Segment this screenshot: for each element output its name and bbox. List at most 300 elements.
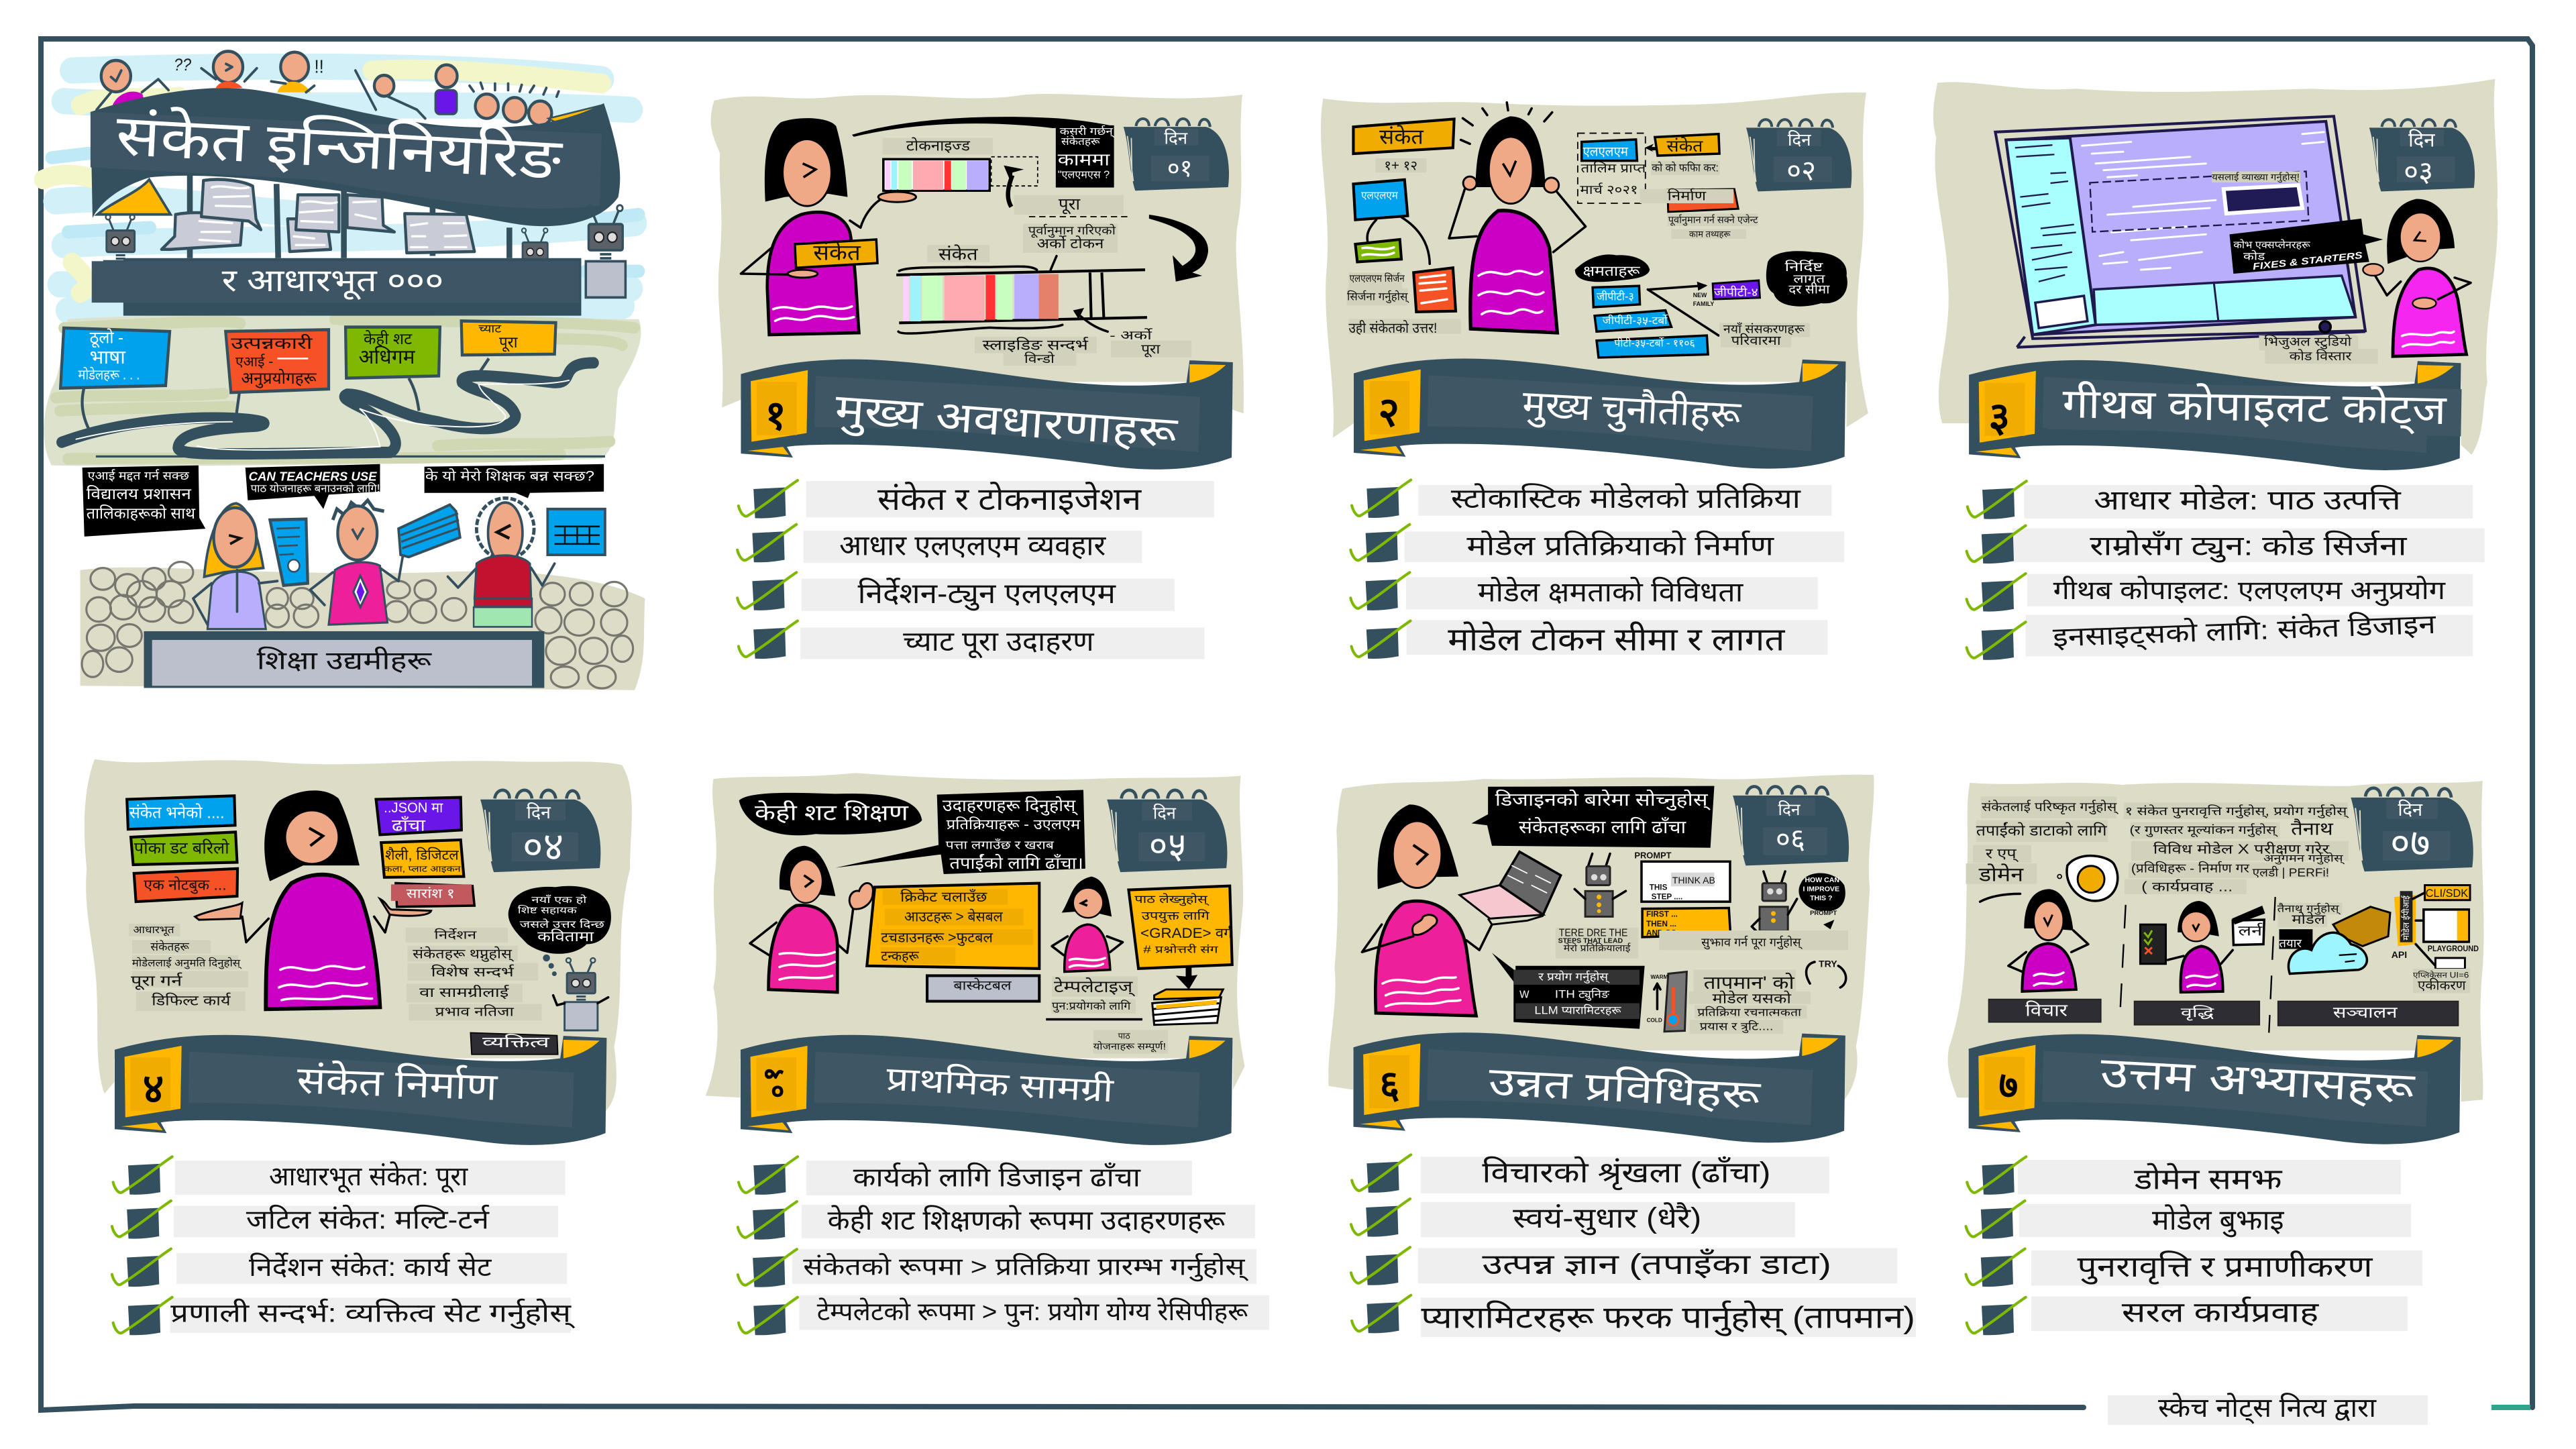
panel: day 2 key challenges — [1321, 93, 1868, 659]
calendar: दिन — [1778, 800, 1801, 819]
thermometer: WARM — [1650, 974, 1668, 980]
prompt sign: १+ १२ — [1384, 159, 1417, 174]
visual studio label: भिजुअल स्टुडियो — [2264, 334, 2353, 350]
sign: generative AI: एआई - — [235, 354, 273, 370]
banner — [1969, 1034, 2461, 1144]
checklist: मोडेल प्रतिक्रियाको निर्माण — [1466, 531, 1775, 561]
model version pills: जीपीटी-३ — [1597, 290, 1634, 303]
checklist: संकेतको रूपमा > प्रतिक्रिया प्रारम्भ गर्नुहोस् — [803, 1252, 1248, 1281]
callout: how prompts work — [1056, 125, 1115, 188]
banner — [741, 1035, 1232, 1145]
api and integrations: एकीकरण — [2418, 978, 2466, 994]
thought cloud: नयाँ एक हो — [531, 894, 587, 905]
right explanation: वा सामग्रीलाई — [419, 985, 510, 1000]
banner: २ — [1378, 389, 1399, 435]
next completion label: - अर्को — [1110, 328, 1153, 342]
title: संकेत इन्जिनियरिङ — [115, 103, 564, 192]
calendar — [1746, 119, 1851, 191]
banner: १ — [759, 1067, 788, 1081]
banner: ७ — [1999, 1064, 2018, 1106]
robot 2 — [1752, 871, 1797, 932]
checklist: संकेत र टोकनाइजेशन — [877, 481, 1142, 517]
main banner — [91, 88, 620, 226]
left explanation — [129, 924, 248, 1011]
left explanation: डिफिल्ट कार्य — [152, 992, 231, 1008]
cloud: how can I improve: THIS ? — [1810, 894, 1832, 902]
sign: chat completion: पूरा — [499, 333, 519, 352]
thought cloud — [508, 886, 611, 976]
checklist — [112, 1157, 576, 1335]
model version pills: जीपीटी-३५-टर्बो — [1603, 314, 1668, 327]
right explanation — [406, 928, 542, 1020]
stack of sheets — [1152, 967, 1223, 1025]
right explanation: निर्देशन — [434, 928, 478, 941]
capabilities cloud: क्षमताहरू — [1582, 264, 1640, 279]
curved arrow — [1149, 215, 1208, 282]
domain note: तपाईंको डाटाको लागि — [1976, 822, 2107, 839]
person — [2363, 199, 2471, 356]
robot middle — [521, 228, 550, 297]
calendar — [1107, 790, 1227, 872]
prompt label cards left: संकेत भनेको .... — [129, 803, 225, 822]
model version pills: जीपीटी-४ — [1714, 285, 1758, 299]
callout: give examples: तपाईंको लागि ढाँचा। — [949, 853, 1083, 873]
LLM trained label: तालिम प्राप्त — [1581, 161, 1646, 175]
sign: chat completion — [462, 321, 556, 374]
visual studio label — [2259, 321, 2378, 364]
robot — [553, 958, 608, 1030]
quoted steps: STEPS THAT LEAD — [1558, 937, 1623, 945]
panel: day 4 prompt construction — [85, 759, 632, 1335]
checklist — [1966, 1157, 2422, 1335]
checklist: आधार मोडेल: पाठ उत्पत्ति — [2094, 484, 2401, 515]
prompt sample: PROMPT — [1634, 851, 1672, 861]
prompt window strip: संकेत — [938, 244, 979, 264]
suggestion line — [1659, 930, 1848, 950]
speech: think about design: डिजाइनको बारेमा सोच्नुहोस् — [1495, 789, 1711, 811]
deploy cloud: तैनाथ गर्नुहोस् — [2277, 902, 2341, 915]
icon: calendar — [547, 509, 605, 555]
template label — [1046, 977, 1142, 1020]
checklist — [1350, 480, 1844, 659]
left explanation: पूरा गर्न — [131, 973, 183, 991]
speech: administrator: विद्यालय प्रशासन — [87, 484, 191, 502]
speech: administrator — [83, 466, 205, 537]
sign: large language models: भाषा — [90, 346, 126, 368]
explain selection: यसलाई व्याख्या गर्नुहोस्! — [2212, 171, 2300, 182]
cloud: how can I improve: PROMPT — [1810, 910, 1837, 916]
domain note: डोमेन — [1978, 863, 2024, 886]
banner: ३ — [1988, 394, 2010, 440]
calendar — [1733, 786, 1849, 865]
prompt sample: AND SO ... — [1646, 929, 1686, 938]
completion label: पूरा — [1059, 195, 1081, 214]
quoted steps: मेरो प्रतिक्रियालाई — [1564, 943, 1631, 953]
tokenized strip: टोकनाइज्ड — [906, 137, 971, 154]
banner — [115, 1035, 606, 1145]
calendar: दिन — [2408, 129, 2435, 152]
banner — [1969, 360, 2462, 470]
checklist: मोडेल बुझाइ — [2152, 1204, 2285, 1238]
callout: how prompts work: काममा — [1058, 151, 1111, 170]
basketball tag — [927, 975, 1039, 1002]
yellow examples board — [867, 883, 1039, 969]
sliding window label — [975, 336, 1097, 366]
character: administrator — [193, 503, 277, 629]
note: same prompt different answers: सिर्जना गर्नुहोस् — [1347, 290, 1409, 303]
sign: large language models: मोडेलहरू . . . — [78, 366, 140, 383]
speech: few shot — [739, 793, 922, 835]
sign: few shot learning — [345, 327, 440, 411]
icon: certificate — [270, 519, 308, 586]
checklist: गीथब कोपाइलट: एलएलएम अनुप्रयोग — [2053, 576, 2446, 606]
quoted steps — [1556, 928, 1638, 959]
audience crowd — [80, 562, 645, 690]
token limits cloud: लागत — [1793, 272, 1826, 286]
footer teal accent — [2491, 1405, 2530, 1410]
banner: मुख्य अवधारणाहरू — [833, 386, 1180, 459]
calendar: ०४ — [523, 825, 564, 869]
banner: गीथब कोपाइलट कोट्ज — [2062, 380, 2448, 435]
sliding window label: विन्डो — [1024, 352, 1055, 366]
template label: पुन:प्रयोगको लागि — [1052, 1000, 1131, 1013]
banner: प्राथमिक सामग्री — [885, 1060, 1115, 1109]
sign: few shot learning: केही शट — [364, 329, 413, 347]
panel: day 1 key concepts — [711, 94, 1244, 659]
LLM trained label: मार्च २०२१ — [1580, 182, 1638, 197]
phase tags: वृद्धि — [2181, 1005, 2215, 1021]
thermometer: COLD — [1647, 1018, 1662, 1024]
person left — [750, 846, 873, 992]
cloud: how can I improve: HOW CAN — [1805, 876, 1839, 884]
prompt label cards right: ..JSON मा — [384, 800, 443, 816]
completion label — [1014, 195, 1128, 253]
iterate note: (र गुणस्तर मूल्यांकन गर्नुहोस् — [2130, 823, 2279, 837]
token limits cloud: दर सीमा — [1788, 282, 1831, 296]
checklist: विचारको श्रृंखला (ढाँचा) — [1482, 1156, 1770, 1190]
checklist: कार्यको लागि डिजाइन ढाँचा — [853, 1162, 1141, 1192]
fabrication block: पूर्वानुमान गर्न सक्ने एजेन्ट — [1668, 213, 1758, 226]
template card: उपयुक्त लागि — [1142, 909, 1210, 923]
character: teacher — [310, 500, 402, 625]
api and integrations: CLI/SDK — [2426, 888, 2468, 900]
banner: मुख्य चुनौतीहरू — [1521, 382, 1743, 439]
api and integrations: एप्लिकेसन UI=6 — [2413, 970, 2469, 979]
banner: उत्तम अभ्यासहरू — [2099, 1049, 2417, 1112]
icon: books — [398, 504, 460, 557]
prompt sample — [1634, 851, 1731, 938]
callout: how prompts work: कसरी गर्छन् — [1060, 125, 1115, 138]
checklist: निर्देशन-ट्युन एलएलएम — [858, 578, 1116, 611]
panel: day 3 github copilot — [1933, 79, 2498, 660]
domain note — [1966, 796, 2119, 902]
arrow up to tokens — [1004, 166, 1024, 207]
sign: few shot learning: अधिगम — [359, 345, 415, 368]
sign: large language models: ठूलो - — [90, 328, 123, 348]
api and integrations: PLAYGROUND — [2428, 945, 2479, 953]
yellow examples board: क्रिकेट चलाउँछ — [900, 889, 988, 905]
domain note: संकेतलाई परिष्कृत गर्नुहोस् — [1982, 800, 2119, 815]
calendar: ०१ — [1167, 154, 1193, 182]
subtitle banner — [92, 258, 581, 316]
token limits cloud: निर्दिष्ट — [1784, 260, 1824, 274]
note: same prompt different answers: उही संकेतको उत्तर! — [1348, 320, 1437, 336]
try cycle: TRY — [1819, 959, 1837, 969]
panel: cover — [43, 51, 645, 690]
banner: उन्नत प्रविधिहरू — [1487, 1059, 1762, 1118]
iterate note: एलडी | PERFi! — [2253, 866, 2329, 879]
person thinking — [1449, 103, 1586, 333]
laptop — [1460, 852, 1561, 924]
model version pills: FAMILY — [1693, 301, 1714, 307]
iterate note — [2124, 802, 2349, 894]
prompt sample: FIRST ... — [1646, 910, 1678, 918]
iterate person — [2140, 901, 2265, 992]
temperature note: तापमान' को — [1704, 972, 1795, 993]
capabilities cloud — [1575, 254, 1650, 282]
banner — [1354, 358, 1845, 469]
iterate person: लर्न — [2239, 923, 2263, 939]
speech: student — [425, 464, 604, 498]
checklist: टेम्पलेटको रूपमा > पुन: प्रयोग योग्य रेसिपीहरू — [817, 1297, 1248, 1328]
temperature note: मोडेल यसको — [1713, 990, 1792, 1006]
banner: ४ — [143, 1065, 164, 1111]
checklist: सरल कार्यप्रवाह — [2122, 1297, 2320, 1328]
template card: <GRADE> वर्ग — [1140, 925, 1233, 941]
iterate note: विविध मोडेल X परीक्षण गरेर — [2153, 842, 2330, 857]
checklist: स्टोकास्टिक मोडेलको प्रतिक्रिया — [1451, 483, 1801, 514]
banner posts and chat bubbles — [162, 175, 509, 258]
checklist: मोडेल क्षमताको विविधता — [1478, 577, 1744, 608]
tokenized strip — [883, 137, 1038, 191]
label: education entrepreneurs — [144, 631, 544, 688]
characters above the banner: ?? — [174, 56, 192, 74]
checklist: राम्रोसँग ट्युन: कोड सिर्जना — [2090, 531, 2408, 563]
prompt sample: THIS — [1650, 883, 1668, 892]
label: education entrepreneurs: शिक्षा उद्यमीहरू — [257, 647, 432, 675]
thought cloud: कवितामा — [537, 928, 594, 945]
watercolor grass — [44, 315, 641, 466]
phase tags: विचार — [2025, 1000, 2068, 1020]
fabrication block: काम तथ्यहरू — [1689, 229, 1731, 239]
temperature note: प्रतिक्रिया रचनात्मकता — [1697, 1006, 1802, 1018]
banner — [741, 360, 1233, 470]
api and integrations: API — [2392, 949, 2407, 960]
visual studio label: कोड विस्तार — [2290, 349, 2352, 363]
footer credit — [2108, 1393, 2428, 1425]
callout: give examples: उदाहरणहरू दिनुहोस् — [943, 796, 1079, 816]
calendar — [2369, 119, 2475, 191]
prompt sample: STEP .... — [1652, 893, 1682, 902]
calendar — [2351, 788, 2473, 871]
callout: FIXES & STARTERS — [2252, 250, 2363, 272]
callout: give examples: प्रतिक्रियाहरू - उएलएम — [947, 816, 1081, 833]
swoosh — [852, 117, 1114, 137]
model version pills: नयाँ संसकरणहरू — [1723, 322, 1805, 336]
model version pills: NEW — [1693, 292, 1707, 299]
callout — [2229, 219, 2383, 274]
prompt label cards left — [127, 796, 237, 902]
robot left — [104, 215, 137, 291]
left explanation: संकेतहरू — [150, 940, 189, 953]
speech: teacher: पाठ योजनाहरू बनाउनको लागि! — [251, 482, 380, 495]
checklist: प्यारामिटरहरू फरक पार्नुहोस् (तापमान) — [1421, 1301, 1915, 1337]
token limits cloud — [1766, 251, 1847, 307]
explain selection — [2090, 171, 2308, 232]
person presenting — [195, 790, 431, 1009]
sign: chat completion: च्याट — [478, 323, 502, 335]
speech: student: के यो मेरो शिक्षक बन्न सक्छ? — [425, 468, 594, 484]
checklist: प्रणाली सन्दर्भ: व्यक्तित्व सेट गर्नुहोस् — [170, 1299, 576, 1330]
banner: ६ — [1380, 1063, 1399, 1106]
callout: give examples — [835, 790, 1085, 874]
checklist: जटिल संकेत: मल्टि-टर्न — [246, 1205, 490, 1235]
robot right — [586, 205, 625, 297]
sliding window label: स्लाइडिङ सन्दर्भ — [983, 336, 1089, 353]
banner: संकेत निर्माण — [297, 1059, 499, 1108]
deploy cloud — [2277, 902, 2390, 973]
checklist — [1351, 1155, 1916, 1337]
panel: day 5 primary content — [706, 773, 1269, 1335]
checklist: च्याट पूरा उदाहरण — [903, 626, 1095, 659]
sign: generative AI: अनुप्रयोगहरू — [241, 368, 317, 388]
cloud: how can I improve: I IMPROVE — [1803, 885, 1839, 893]
speech: teacher: CAN TEACHERS USE — [249, 470, 378, 484]
note: same prompt different answers — [1346, 272, 1461, 336]
prompt label cards left: एक नोटबुक ... — [144, 877, 227, 894]
thought cloud: जसले उत्तर दिन्छ — [520, 918, 604, 930]
domain note: र एप् — [1986, 847, 2019, 863]
callout: कोभ एक्सप्लेनरहरू — [2233, 239, 2311, 251]
prompt window strip — [896, 244, 1147, 333]
left explanation: आधारभूत — [133, 924, 174, 936]
prompt sign: संकेत — [1379, 124, 1424, 148]
prompt label cards right — [376, 798, 474, 907]
person with laptop — [1362, 804, 1492, 1016]
prompt arrow sign: को को फफिा कर: — [1652, 161, 1719, 174]
calendar: ०५ — [1149, 826, 1186, 866]
speech: think about design — [1472, 786, 1715, 848]
try cycle — [1807, 959, 1846, 987]
checklist: उत्पन्न ज्ञान (तपाइँका डाटा) — [1482, 1248, 1831, 1280]
prompt sign — [1353, 119, 1454, 174]
yellow examples board: आउटहरू > बेसबल — [904, 908, 1003, 924]
checklist: इनसाइट्सको लागि: संकेत डिजाइन — [2052, 609, 2437, 654]
grass strokes — [56, 319, 635, 459]
panel: day 7 best practices — [1948, 781, 2484, 1335]
calendar — [1124, 119, 1229, 191]
calendar: दिन — [1788, 129, 1811, 150]
basketball tag: बास्केटबल — [953, 978, 1012, 994]
template label: टेम्पलेटाइज् — [1054, 977, 1136, 997]
next completion label: पूरा — [1141, 342, 1161, 358]
LLM trained label: एलएलएम — [1582, 145, 1629, 160]
callout: कोड — [2243, 250, 2265, 262]
callout: tuning — [1492, 953, 1645, 1029]
subtitle banner: र आधारभूत ००० — [222, 263, 443, 301]
robot 1 — [1574, 854, 1625, 916]
checklist: केही शट शिक्षणको रूपमा उदाहरणहरू — [828, 1205, 1226, 1236]
panel: day 6 advanced techniques — [1328, 775, 1916, 1337]
persona tag — [470, 1032, 558, 1055]
yellow examples board: टचडाउनहरू >फुटबल — [881, 930, 994, 947]
deploy cloud: तयार — [2279, 936, 2302, 950]
iterate note: ( कार्यप्रवाह ... — [2141, 879, 2233, 894]
character: student — [448, 498, 555, 627]
LLM model flow — [1353, 180, 1456, 312]
deploy cloud: मोडेल — [2292, 912, 2326, 927]
iterate note: १ संकेत पुनरावृत्ति गर्नुहोस्, प्रयोग गर्नुहोस् — [2125, 804, 2349, 818]
callout: give examples: पत्ता लगाउँछ र खराब — [946, 839, 1055, 852]
iterate note: अनुगमन गर्नुहोस् — [2263, 852, 2346, 865]
watercolor sky — [43, 66, 639, 311]
prompt arrow sign — [1645, 134, 1720, 175]
next completion label — [1110, 328, 1191, 358]
lesson plans label: योजनाहरू सम्पूर्ण! — [1093, 1041, 1166, 1053]
calendar: दिन — [527, 802, 551, 822]
banner: १ — [765, 392, 786, 438]
model version pills: परिवारमा — [1731, 333, 1782, 348]
calendar — [480, 790, 600, 872]
api and integrations: मोडेल ईपीआई — [2401, 895, 2411, 941]
calendar: ०२ — [1786, 154, 1816, 186]
callout: tuning: LLM प्यारामिटरहरू — [1534, 1004, 1621, 1016]
completion label: अर्को टोकन — [1037, 235, 1105, 252]
quoted steps: TERE DRE THE — [1559, 928, 1627, 939]
template card — [1128, 886, 1233, 969]
speech: administrator: तालिकाहरूको साथ — [87, 504, 195, 522]
checklist: मोडेल टोकन सीमा र लागत — [1448, 621, 1786, 657]
banner: ० — [771, 1077, 784, 1105]
checklist: पुनरावृत्ति र प्रमाणीकरण — [2078, 1250, 2373, 1285]
speech: teacher — [246, 464, 380, 509]
prompt sample: THINK AB — [1672, 875, 1715, 885]
person with prompt — [741, 118, 916, 335]
LLM trained label — [1578, 133, 1646, 203]
phase tags — [1989, 1000, 2458, 1026]
callout: how prompts work: "एलएमएस ? — [1058, 169, 1110, 180]
callout: how prompts work: संकेतहरू — [1061, 135, 1100, 148]
calendar: दिन — [1153, 804, 1177, 823]
right explanation: प्रभाव नतिजा — [435, 1004, 515, 1019]
checklist: आधारभूत संकेत: पूरा — [269, 1161, 468, 1193]
calendar: ०७ — [2390, 822, 2430, 865]
divider dashes — [2120, 897, 2275, 1032]
characters above the banner — [97, 51, 601, 133]
callout: tuning: र प्रयोग गर्नुहोस् — [1538, 970, 1611, 983]
prompt label cards right: सारांश १ — [407, 886, 455, 901]
lesson plans label — [1093, 1030, 1168, 1054]
template card: पाठ लेख्नुहोस् — [1134, 893, 1210, 906]
monitor screen — [1995, 116, 2365, 347]
callout: tuning: ITH ट्युनिङ — [1555, 987, 1609, 1001]
prompt label cards right: कला, प्लाट आइकन — [384, 864, 462, 874]
prompt label cards right: ढाँचा — [392, 816, 426, 835]
speech: few shot: केही शट शिक्षण — [755, 800, 909, 825]
checklist: डोमेन समझ — [2133, 1163, 2283, 1195]
callout: tuning: W — [1519, 989, 1529, 1000]
prompt label cards left: पोका डट बरिलो — [134, 839, 229, 858]
sign: large language models — [60, 328, 170, 428]
footer credit: स्केच नोट्स नित्य द्वारा — [2158, 1393, 2377, 1424]
fabrication block — [1640, 188, 1758, 239]
checklist: निर्देशन संकेत: कार्य सेट — [249, 1252, 492, 1282]
model version pills — [1593, 280, 1810, 358]
characters above the banner: !! — [315, 56, 324, 76]
temperature note: प्रयास र त्रुटि.... — [1700, 1020, 1774, 1033]
calendar: ०६ — [1776, 823, 1805, 855]
thought cloud: शिष्ट सहायक — [518, 905, 578, 916]
